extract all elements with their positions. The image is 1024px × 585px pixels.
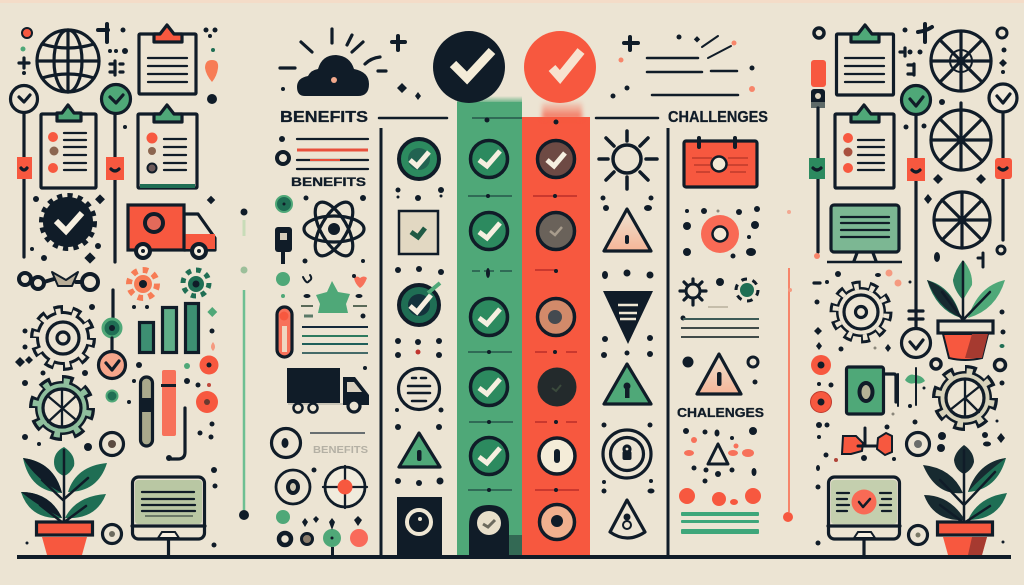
icon: dark circles on red band bbox=[538, 140, 576, 540]
icon: dots bbox=[395, 408, 444, 430]
icon: black block with ring bbox=[397, 497, 442, 557]
text block: short lines with dots bbox=[281, 294, 368, 353]
icon: dots bbox=[395, 338, 442, 358]
icon: sun bbox=[599, 131, 657, 189]
icon: red ringed dots bbox=[810, 355, 832, 412]
icon: small dots top left bbox=[19, 24, 218, 129]
icon: small dots lower right bbox=[814, 300, 1006, 546]
icon: red dots row bbox=[679, 488, 761, 506]
icon: check pin outline right bbox=[989, 84, 1017, 254]
icon: dots bbox=[600, 196, 654, 211]
icon: green vertical marker bbox=[239, 220, 249, 520]
icon: dots bbox=[602, 479, 654, 494]
icon: wheel three bbox=[934, 192, 990, 248]
icon: dots bbox=[395, 266, 444, 275]
text block: lines and benefits subheading: BENEFITS bbox=[291, 175, 366, 189]
icon: gear green with wheel bbox=[34, 380, 90, 436]
icon: dots bbox=[602, 270, 654, 279]
icon: concentric circles lock bbox=[603, 430, 651, 478]
icon: clipboard red bbox=[139, 25, 196, 94]
icon: clipboard green bbox=[836, 25, 894, 95]
icon: big red check circle bbox=[524, 31, 596, 103]
icon: small plug and dots bbox=[275, 195, 367, 288]
icon: green blob with line bbox=[905, 368, 926, 408]
baseline bbox=[17, 555, 1011, 559]
icon: green star bbox=[316, 281, 350, 313]
icon: ring near plant bbox=[908, 526, 928, 544]
icon: dots bbox=[601, 335, 653, 358]
icon: check circle bbox=[399, 139, 439, 179]
icon: red vertical marker bbox=[783, 210, 793, 522]
icon: green warning triangle bbox=[399, 433, 440, 467]
icon: red calendar bbox=[684, 138, 757, 187]
icon: clipboard with dots 2 bbox=[138, 105, 197, 188]
panel: red check list bbox=[533, 120, 579, 540]
panel: icon column beside challenges bbox=[596, 118, 668, 556]
icon: check pin green right bbox=[902, 86, 930, 358]
icon: connector pins bbox=[98, 290, 126, 544]
icon: dots bbox=[396, 187, 444, 201]
icon: warning triangle keyhole bbox=[610, 500, 645, 538]
icon: globe bbox=[37, 30, 99, 92]
icon: check pin green bbox=[102, 84, 130, 262]
icon: square with check bbox=[399, 211, 438, 254]
icon: big dark check circle bbox=[433, 31, 505, 103]
icon: wheel one bbox=[931, 31, 991, 91]
icon: clipboard with dots bbox=[41, 105, 96, 188]
icon: warning triangle peach bbox=[604, 209, 651, 251]
vertical divider bbox=[380, 128, 382, 556]
icon: small dots lower left bbox=[15, 304, 218, 548]
separators red bbox=[533, 196, 579, 490]
text block: challenges lines bbox=[680, 316, 759, 337]
panel: right icon column bbox=[788, 24, 1017, 556]
icon: warning triangle challenges bbox=[682, 354, 758, 394]
vertical divider bbox=[666, 128, 670, 556]
icon: chain of links bbox=[19, 272, 98, 290]
icon: green gear bbox=[183, 270, 209, 296]
icon: pills and tubes bbox=[140, 370, 185, 461]
icon: green check circles bbox=[470, 140, 508, 474]
icon: gear right bbox=[834, 285, 888, 339]
icon: red circle with dots bbox=[683, 206, 760, 258]
icon: plant top right bbox=[927, 260, 1005, 360]
icon: cloud with sun rays bbox=[280, 29, 421, 100]
icon: black truck bbox=[287, 366, 369, 412]
icon: row of small pins bbox=[276, 510, 368, 556]
panel: challenges column bbox=[610, 34, 793, 534]
icon: plus and header strokes bbox=[610, 34, 755, 98]
subheading: chalenges: CHALENGES bbox=[677, 405, 764, 420]
icon: green monitor bbox=[827, 205, 902, 262]
icon: ring small bbox=[906, 432, 930, 456]
text block: lines and benefits subheading bbox=[277, 136, 368, 189]
text block: green lines bbox=[681, 512, 759, 534]
icon: inverted dark triangle bbox=[603, 291, 653, 344]
icon: ring and target bbox=[276, 466, 367, 508]
icon: red gear bbox=[129, 270, 157, 298]
panel: left icon column bbox=[10, 24, 249, 556]
icon: green warning triangle keyhole bbox=[604, 364, 651, 404]
icon: dark arch with faded check bbox=[469, 505, 522, 557]
text block: faded benefits label bbox=[272, 428, 368, 458]
bar chart bbox=[140, 304, 198, 352]
icon: small dots top right bbox=[900, 24, 1007, 267]
icon: plant in pot bbox=[21, 447, 107, 555]
icon: circle with text lines bbox=[398, 368, 440, 410]
divider line above bbox=[596, 117, 658, 119]
icon: dots bbox=[395, 478, 444, 486]
icon: atom bbox=[304, 197, 364, 261]
heading: benefits: BENEFITS bbox=[280, 109, 368, 126]
icon: small triangle with scattered dots bbox=[683, 427, 757, 484]
icon: plant bottom right bbox=[923, 445, 1007, 555]
divider line under benefits heading bbox=[379, 117, 447, 119]
icon: pill red bbox=[277, 307, 292, 357]
dots on separators bbox=[553, 120, 558, 492]
icon: red delivery truck bbox=[128, 205, 215, 258]
column: benefits green band bbox=[457, 96, 522, 555]
icon: gear pale right bbox=[937, 370, 993, 426]
text block: faded benefits label: BENEFITS bbox=[313, 445, 368, 456]
icon: red dumbbell bbox=[842, 428, 892, 455]
icon: gear outline bbox=[35, 310, 91, 366]
dots on green separators bbox=[484, 118, 491, 492]
icon: green mug bbox=[846, 367, 898, 414]
icon: clipboard with red dots bbox=[835, 105, 894, 188]
heading: challenges: CHALLENGES bbox=[668, 109, 768, 126]
icon: monitor bbox=[132, 477, 205, 556]
icon: small gears bbox=[680, 278, 758, 307]
icon: ring top bbox=[814, 28, 824, 38]
panel: green check list bbox=[468, 118, 522, 557]
icon: check pin outline bbox=[10, 86, 38, 257]
panel: benefits column bbox=[272, 29, 447, 556]
icon: dots bbox=[602, 422, 652, 428]
icon: scattered dots around badge bbox=[30, 194, 248, 264]
icon: check circle with swoosh bbox=[399, 283, 440, 325]
separators green bbox=[468, 118, 522, 490]
icon: monitor with red check bbox=[828, 477, 900, 556]
icon: scattered dots above gear bbox=[788, 270, 912, 292]
panel: icon column between divider and green band bbox=[395, 139, 444, 557]
icon: tube with green tag bbox=[809, 60, 826, 259]
icon: check badge bbox=[42, 196, 94, 248]
column: challenges red band bbox=[522, 102, 590, 555]
icon: red target dots bbox=[184, 307, 218, 413]
icon: wheel two bbox=[931, 103, 991, 170]
